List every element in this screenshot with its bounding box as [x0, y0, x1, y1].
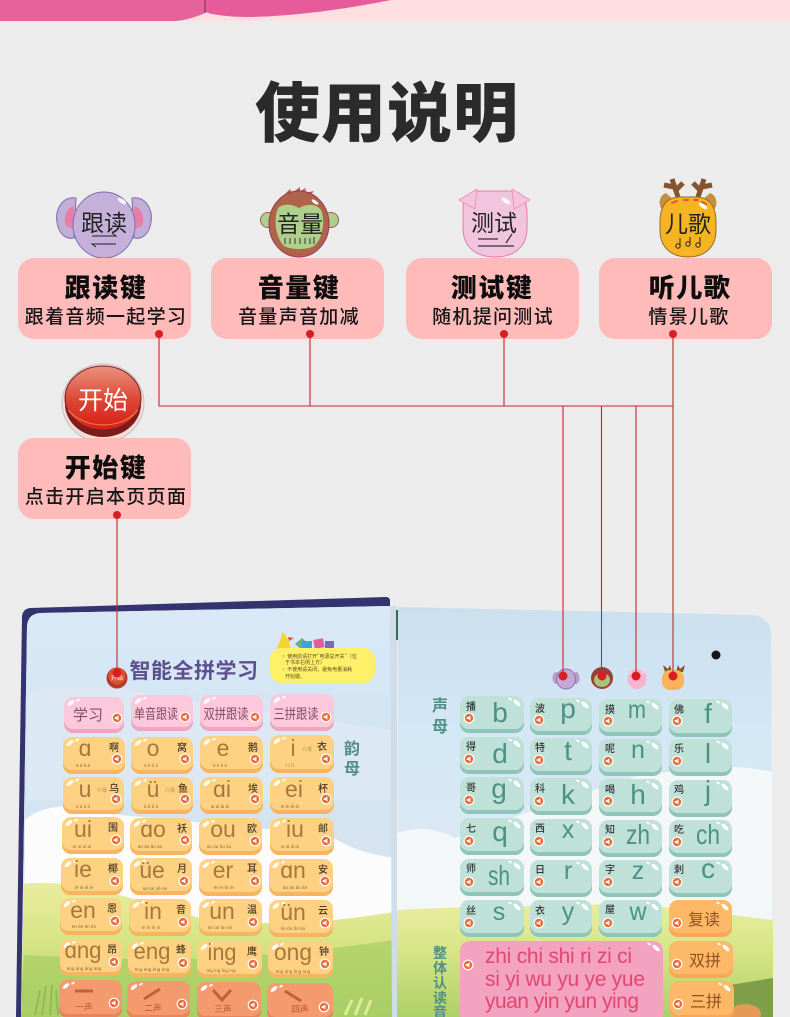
button: er: ēr ér ěr èr [214, 885, 235, 890]
button: g [460, 773, 524, 814]
button: tone 2: 二声 [144, 1002, 162, 1014]
button: n: 呢 [605, 740, 615, 755]
button: f: 佛 [674, 701, 684, 716]
button: ü: 介母 [165, 787, 175, 794]
button: ing: ing [208, 939, 236, 965]
button: u: u [79, 776, 91, 802]
panel: whole-syllable pink button: yuan yin yun ying [485, 990, 639, 1013]
button: 三拼跟读 [270, 694, 334, 731]
button: un: un [209, 898, 235, 924]
button: t [530, 735, 592, 775]
card: 音量键: 音量键 [258, 268, 340, 305]
button: ei: ei [285, 776, 303, 802]
button: tone 3: 三声 [214, 1003, 232, 1015]
button: h: 喝 [605, 781, 615, 796]
button: t: t [564, 735, 572, 766]
button: an [269, 857, 333, 896]
button: a: ā á ǎ à [76, 763, 90, 768]
button: ü: 鱼 [178, 780, 188, 795]
label: 声母 [432, 692, 448, 737]
button: üe: 月 [177, 860, 187, 875]
button: ing: īng íng ǐng ìng [206, 968, 236, 973]
mini icon: monkey [591, 667, 613, 689]
connector dots [112, 330, 678, 680]
button: eng: ēng éng ěng èng [135, 967, 170, 972]
icon: deer song key [660, 179, 716, 257]
icon: pig test key [459, 189, 530, 257]
button: n [599, 736, 662, 776]
button: ui [62, 816, 124, 854]
panel: whole-syllable pink button: si yi wu yu ye yue [485, 968, 645, 991]
button: ai: āi ái ǎi ài [211, 804, 229, 809]
button: n: n [631, 736, 645, 764]
button: iu [270, 816, 334, 855]
button: q [460, 816, 524, 855]
button: u: 乌 [109, 780, 119, 795]
button: c [669, 853, 732, 897]
book: right page background [397, 607, 773, 1017]
button: j: 鸡 [674, 781, 684, 796]
button: y [530, 898, 592, 937]
button: en: ēn én ěn èn [72, 924, 97, 929]
button: h [599, 779, 662, 816]
button: ong: ōng óng ǒng òng [276, 969, 311, 974]
card: 听儿歌: 情景儿歌 [648, 302, 730, 329]
button: c: 刺 [674, 861, 684, 876]
button: u: 介母 [97, 787, 107, 794]
button: in [129, 898, 191, 936]
button: er: er [213, 857, 234, 883]
button: üe [130, 857, 192, 895]
label: 声母: 母 [432, 713, 448, 737]
button: 三拼: 三拼 [690, 988, 722, 1012]
button: üe: üe [139, 857, 165, 883]
mini icon: pig [627, 669, 647, 689]
button: a: ɑ [79, 735, 91, 761]
button: i: ī í ǐ ì [286, 763, 294, 768]
button: ü: ǖ ǘ ǚ ǜ [144, 802, 158, 809]
icon: red start button: 开始 [78, 381, 128, 417]
panel: whole-syllable pink button [460, 941, 663, 1017]
button: ai: ɑi [213, 776, 231, 802]
button: üe: üē üé üě üè [143, 886, 168, 891]
button: d: 得 [466, 738, 476, 753]
button: i: i [290, 735, 296, 761]
button: ing: 鹰 [247, 943, 257, 958]
button: i [270, 735, 334, 773]
button: k: k [561, 779, 576, 810]
button: u [63, 776, 124, 814]
button: u: ū ú ǔ ù [76, 804, 90, 809]
button: ao: ɑo [140, 816, 166, 842]
button: tone 4: 四声 [291, 1003, 309, 1015]
button: an: 安 [318, 861, 328, 876]
button: ün [269, 899, 333, 937]
button: ün: ǖn ǘn ǚn ǜn [281, 924, 306, 931]
button: ang: āng áng ǎng àng [67, 966, 102, 971]
button: b: b [492, 697, 508, 728]
button: h: h [630, 779, 646, 810]
button: 学习 [64, 697, 124, 733]
card: 跟读键 [18, 258, 191, 339]
card: 开始键: 点击开启本页页面 [25, 482, 187, 509]
card: 测试键: 测试键 [451, 268, 533, 305]
button: o: o [147, 735, 159, 761]
mini start button: 开始 [111, 673, 123, 682]
button: 学习: 学习 [73, 704, 103, 725]
button: ie [61, 856, 123, 895]
button: s: 丝 [466, 902, 476, 917]
button: p [530, 693, 592, 735]
card: 跟读键: 跟着音频一起学习 [25, 302, 187, 329]
button: q: q [492, 816, 508, 847]
button: g: 哥 [466, 779, 476, 794]
button: 三拼跟读: 三拼跟读 [274, 704, 318, 724]
callout: yellow usage note [270, 648, 375, 683]
button: l: l [705, 738, 711, 769]
button: in: 音 [176, 901, 186, 916]
button: ao: āo áo ǎo ào [138, 844, 163, 849]
button: tone 4 [267, 983, 333, 1017]
label: 整体认读音节: 认 [433, 973, 447, 993]
button: s [460, 898, 524, 937]
button: ai: 埃 [248, 780, 258, 795]
connector lines [117, 334, 673, 676]
button: k [530, 778, 592, 815]
button: e: ē é ě è [213, 763, 227, 768]
button: ao [130, 816, 192, 855]
icon: red start button [62, 364, 144, 442]
label: 韵母: 韵 [344, 735, 360, 759]
button: ang [60, 937, 122, 976]
card: 开始键: 开始键 [65, 448, 147, 485]
button: y: y [562, 898, 575, 926]
button: ong: ong [274, 939, 312, 965]
button: iu: 邮 [318, 820, 328, 835]
icon: deer song key: 儿歌 [665, 205, 711, 239]
button: e [200, 735, 263, 773]
button: ou [199, 816, 262, 855]
button: ch: 吃 [674, 821, 684, 836]
button: o: 窝 [177, 739, 187, 754]
mini start button [106, 668, 128, 688]
button: eng: 蜂 [176, 941, 186, 956]
button: f: f [704, 698, 712, 729]
button: 三拼 [670, 981, 734, 1017]
button: eng: eng [134, 938, 170, 964]
label: 整体认读音节: 整 [433, 943, 447, 963]
button: d: d [492, 738, 508, 769]
card: 测试键 [406, 258, 579, 339]
button: z [599, 857, 662, 897]
mini icon: deer [662, 665, 685, 690]
button: o [131, 735, 193, 774]
icon: elephant read-along key: 跟读 [81, 204, 127, 238]
button: ing [197, 939, 262, 978]
button: d [460, 737, 524, 774]
button: p: 波 [535, 700, 545, 715]
button: iu: iū iú iǔ iù [281, 844, 300, 849]
button: ong [268, 939, 333, 978]
button: e: 鹅 [248, 739, 258, 754]
button: m [599, 696, 662, 736]
button: a [63, 735, 125, 774]
button: er: 耳 [247, 860, 257, 875]
button: b [460, 696, 524, 733]
button: ang: 昂 [107, 941, 117, 956]
button: 双拼跟读: 双拼跟读 [204, 704, 248, 724]
button: un [199, 898, 262, 936]
button: sh: sh [488, 860, 510, 891]
label: 韵母 [344, 735, 360, 779]
button: zh: zh [626, 819, 650, 850]
book: left page background [21, 606, 396, 1017]
button: x: 西 [535, 820, 545, 835]
icon: pig test key: 测试 [471, 204, 517, 238]
button: er [199, 857, 262, 896]
button: m: m [628, 696, 646, 724]
button: an: ān án ǎn àn [283, 885, 308, 890]
card: 跟读键: 跟读键 [65, 268, 147, 305]
card: 音量键 [211, 258, 384, 339]
button: j [669, 775, 732, 817]
button: b: 播 [466, 698, 476, 713]
button: ei [270, 776, 334, 814]
button: p: p [560, 693, 576, 724]
button: l [669, 738, 732, 776]
label: 声母: 声 [432, 692, 448, 716]
button: j: j [704, 775, 711, 806]
button: en: en [70, 897, 96, 923]
button: q: 七 [466, 820, 476, 835]
button: ui: 围 [108, 819, 118, 834]
button: sh [460, 859, 524, 896]
top banner: pink book edge [0, 0, 790, 21]
button: ün: 云 [318, 902, 328, 917]
button: x: x [562, 816, 575, 844]
button: a: 啊 [109, 739, 119, 754]
button: w [599, 898, 662, 937]
button: ch [669, 819, 732, 857]
button: y: 衣 [535, 902, 545, 917]
button: c: c [701, 853, 715, 884]
card: 音量键: 音量声音加减 [238, 302, 360, 329]
button: 单音跟读: 单音跟读 [134, 704, 178, 724]
button: ao: 袄 [177, 820, 187, 835]
callout: yellow usage note: · 使用前请打开"电源总开关"（位 [281, 653, 357, 660]
callout: yellow usage note: 于书本右侧上方） [285, 659, 325, 666]
button: tone 1: 一声 [75, 1001, 93, 1013]
button: un: 温 [247, 901, 257, 916]
button: ei: ēi éi ěi èi [281, 804, 299, 809]
button: w: w [629, 898, 647, 926]
button: ü: ü [147, 776, 159, 802]
button: ün: ün [280, 899, 306, 925]
button: 双拼: 双拼 [689, 947, 721, 971]
button: 复读: 复读 [688, 906, 720, 930]
button: m: 摸 [605, 701, 615, 716]
button: 双拼跟读 [200, 695, 263, 731]
button: r: 日 [535, 861, 545, 876]
button: 单音跟读 [131, 695, 193, 731]
button: ie: iē ié iě iè [75, 885, 94, 890]
card: 听儿歌 [599, 258, 772, 339]
button: ui: ui [74, 816, 92, 842]
label: 整体认读音节: 体 [433, 958, 447, 978]
heading: 智能全拼学习: 智能全拼学习 [130, 655, 258, 685]
button: 双拼 [669, 941, 733, 978]
card: 开始键 [18, 438, 191, 519]
button: tone 3 [197, 982, 261, 1017]
button: f [669, 698, 732, 737]
icon: monkey volume key: 音量 [277, 205, 323, 239]
button: e: e [217, 735, 229, 761]
button: ong: 钟 [319, 943, 329, 958]
label: 韵母: 母 [344, 755, 360, 779]
duck and usage tabs [277, 632, 334, 652]
button: t: 特 [535, 739, 545, 754]
card: 听儿歌: 听儿歌 [649, 268, 731, 305]
button: l: 乐 [674, 740, 684, 755]
book: navy cover [16, 597, 390, 1017]
label: 整体认读音节 [433, 943, 447, 1017]
button: r: r [564, 857, 572, 885]
button: ei: 杯 [318, 780, 328, 795]
card: 测试键: 随机提问测试 [432, 302, 554, 329]
button: zh [599, 819, 662, 857]
button: ou: ōu óu ǒu òu [207, 844, 232, 849]
button: tone 2 [127, 981, 190, 1017]
button: ang: ɑng [64, 937, 102, 963]
button: sh: 师 [466, 860, 476, 875]
button: 复读 [669, 900, 732, 937]
button: r [530, 857, 592, 897]
button: tone 1 [59, 980, 122, 1017]
button: en: 恩 [107, 900, 117, 915]
button: in: īn ín ǐn ìn [142, 925, 161, 930]
button: ou: 欧 [247, 820, 257, 835]
button: ie: ie [74, 856, 92, 882]
button: x [530, 816, 592, 856]
button: en [60, 897, 122, 935]
button: ui: uī uí uǐ uì [73, 844, 91, 849]
button: an: ɑn [280, 857, 306, 883]
button: ou: ou [210, 816, 236, 842]
callout: yellow usage note: 开始键。 [285, 673, 305, 680]
button: i: 衣 [317, 738, 327, 753]
button: w: 屋 [605, 901, 615, 916]
book: spine [390, 606, 398, 1017]
button: iu: iu [286, 816, 304, 842]
button: z: z [632, 857, 644, 885]
button: g: g [491, 773, 507, 804]
button: ie: 椰 [108, 860, 118, 875]
button: un: ūn ún ǔn ùn [208, 925, 233, 930]
mini icon: elephant [552, 669, 580, 689]
button: ch: ch [696, 819, 720, 850]
title: 使用说明 [255, 61, 519, 155]
button: ai [200, 776, 263, 814]
button: eng [128, 938, 191, 977]
panel: whole-syllable pink button: zhi chi shi ri zi ci [485, 945, 632, 968]
button: k: 科 [535, 780, 545, 795]
button: o: ō ó ǒ ò [144, 763, 158, 768]
button: zh: 知 [605, 821, 615, 836]
button: z: 字 [605, 861, 615, 876]
camera hole [712, 650, 720, 660]
icon: monkey volume key [260, 187, 338, 257]
button: s: s [493, 898, 505, 926]
callout: yellow usage note: · 不使用请关闭，避免电量消耗 [281, 666, 352, 673]
button: ü [131, 776, 193, 814]
label: 整体认读音节: 读 [433, 988, 447, 1008]
button: i: 介母 [302, 746, 312, 753]
button: in: in [144, 898, 162, 924]
icon: elephant read-along key [57, 192, 151, 258]
